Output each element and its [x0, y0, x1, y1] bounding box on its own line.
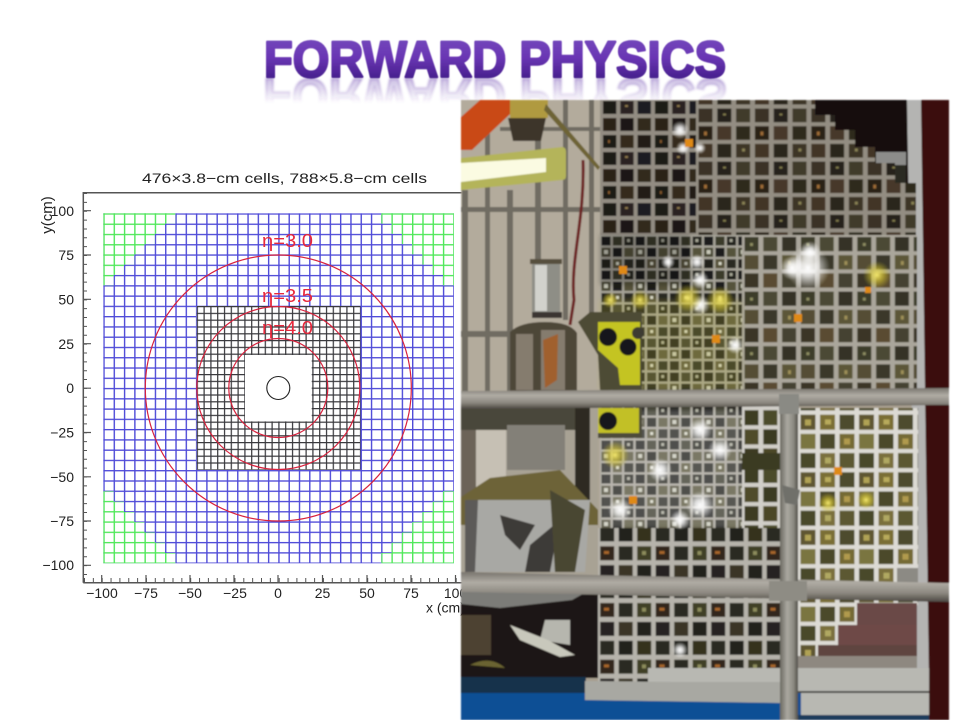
vertical pipe — [769, 394, 807, 720]
central hole — [245, 355, 312, 421]
orange markers — [619, 139, 871, 504]
green corner cells — [103, 213, 454, 563]
photo base — [461, 100, 949, 720]
y axis labels: −100 — [42, 557, 74, 573]
blue floor strip — [461, 677, 929, 720]
orange cable bundle — [461, 100, 525, 150]
large cells stair lower right — [797, 600, 857, 656]
y axis labels: −25 — [50, 424, 74, 440]
yellow panel lower — [590, 408, 642, 438]
diagonal strut — [544, 104, 600, 170]
eta labels: η=4.0 — [262, 318, 313, 338]
y axis labels: 0 — [66, 380, 74, 396]
eta labels: η=3.5 — [262, 286, 313, 306]
y axis labels: −50 — [50, 469, 74, 485]
detector background upper right — [815, 100, 912, 190]
axes frame and ticks — [83, 193, 470, 583]
y axis labels: 50 — [58, 292, 74, 308]
cell grid — [103, 213, 454, 563]
yellow panel upper — [578, 312, 644, 390]
y axis labels: 100 — [51, 203, 74, 219]
title — [263, 31, 727, 125]
x axis labels: 75 — [403, 585, 419, 601]
chart: calorimeter cell layout — [39, 170, 470, 616]
y axis labels: −75 — [50, 513, 74, 529]
wrapped foil unit — [510, 322, 577, 392]
y axis labels: 25 — [58, 336, 74, 352]
large cells lower right — [797, 408, 918, 605]
x axis labels: −25 — [223, 585, 247, 601]
large cells upper left — [600, 100, 700, 235]
x axis labels: 100 — [444, 585, 467, 601]
large cells lower centre — [742, 393, 782, 533]
large cells lower left — [598, 528, 783, 683]
y axis labels — [42, 203, 74, 573]
red cable — [570, 160, 583, 325]
x axis labels: −75 — [134, 585, 158, 601]
large cells upper right — [696, 100, 916, 240]
x axis labels: −50 — [178, 585, 202, 601]
x axis labels: 50 — [359, 585, 375, 601]
x axis labels — [86, 585, 467, 601]
eta labels: η=3.0 — [262, 231, 313, 251]
title text: FORWARD PHYSICS — [264, 31, 726, 88]
title reflection: FORWARD PHYSICS — [263, 67, 727, 125]
x axis labels: 25 — [315, 585, 330, 601]
lower support bars — [585, 668, 929, 715]
fluorescent lamp — [461, 147, 566, 190]
hanging basket — [508, 118, 546, 141]
wall scaffolding — [461, 100, 601, 400]
lower left equipment — [461, 405, 598, 598]
inner black cells — [197, 306, 360, 470]
yellow box — [510, 100, 548, 118]
y axis title: y(cm) — [39, 196, 56, 234]
upper horizontal pipe — [461, 388, 949, 409]
eta circles — [145, 255, 411, 521]
y axis labels: 75 — [58, 247, 74, 263]
chart title: 476×3.8−cm cells, 788×5.8−cm cells — [142, 170, 427, 186]
photo: detector array — [461, 100, 949, 720]
x axis labels: 0 — [274, 585, 282, 601]
large cells middle — [742, 235, 917, 393]
cylinder sensor — [530, 259, 562, 318]
small cell brightness zones — [600, 235, 742, 528]
beam pipe — [267, 376, 290, 400]
eta labels — [262, 231, 313, 338]
bright reflections — [601, 121, 891, 658]
lower left dark cavity — [461, 590, 598, 678]
x axis title: x (cm) — [426, 600, 465, 616]
x axis labels: −100 — [86, 585, 118, 601]
lower horizontal pipe — [461, 572, 949, 602]
outer blue cells — [103, 213, 454, 563]
small cells block — [600, 235, 742, 528]
brown absorber steps — [798, 603, 917, 675]
dark red backing wall — [918, 100, 949, 720]
grey corner plate — [897, 568, 918, 584]
dark cell patch — [742, 453, 780, 470]
silver side rail — [907, 100, 929, 680]
